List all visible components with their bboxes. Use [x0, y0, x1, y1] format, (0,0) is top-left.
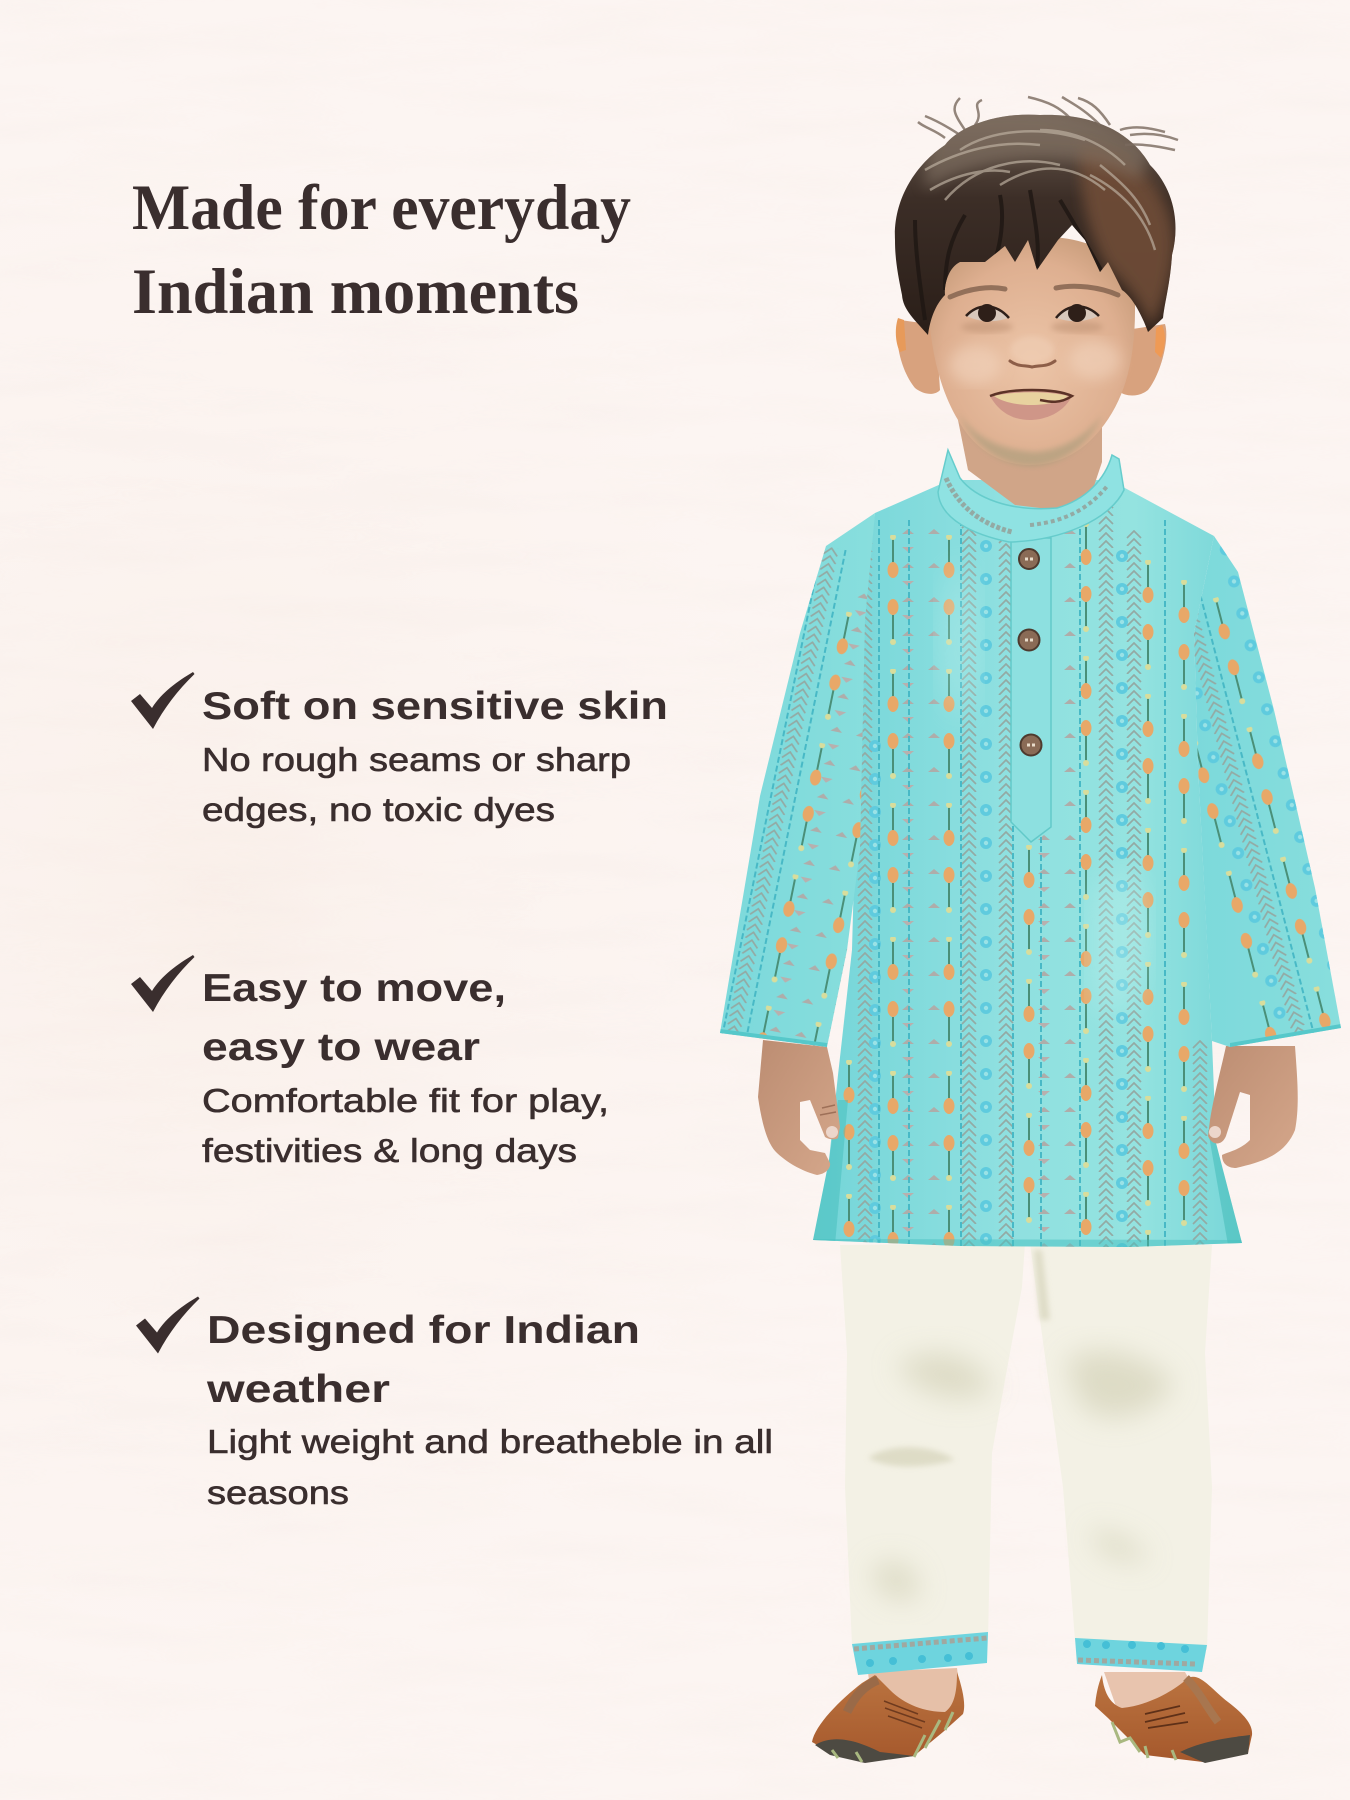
- kurta collar: [938, 450, 1124, 542]
- benefit heading: [206, 1309, 640, 1411]
- cheek highlights: [949, 340, 1121, 385]
- benefit description: [202, 1082, 609, 1169]
- right trouser cuff: [1075, 1638, 1207, 1672]
- photo: smiling boy in kurta: [684, 97, 1350, 1763]
- benefit description: Comfortable fit for play,: [202, 1082, 609, 1119]
- trouser wrinkle lines: [868, 1250, 1050, 1466]
- benefit heading: weather: [206, 1368, 390, 1411]
- smile: [990, 390, 1072, 420]
- icon: check mark: [136, 1296, 200, 1354]
- brown side of hair: [925, 108, 1175, 330]
- ears: [896, 318, 1166, 396]
- right trouser leg: [1030, 1243, 1212, 1650]
- head: [895, 97, 1178, 466]
- benefit description: seasons: [207, 1474, 349, 1511]
- face: [928, 236, 1135, 465]
- left sleeve: [720, 513, 875, 1047]
- title: Indian moments: [132, 256, 579, 328]
- under-eye shading: [961, 321, 1103, 333]
- kurta buttons: [1018, 549, 1042, 756]
- right shoe: [1095, 1672, 1252, 1763]
- icon: check mark: [131, 955, 194, 1012]
- hair: [895, 97, 1178, 335]
- right hand: [1208, 1046, 1298, 1168]
- title: Made for everyday: [132, 172, 631, 244]
- icon: check mark: [131, 672, 194, 729]
- benefit description: edges, no toxic dyes: [202, 791, 555, 828]
- left hand: [758, 1040, 840, 1175]
- eyebrows: [950, 286, 1118, 297]
- title: [132, 172, 631, 328]
- stray hair wisps: [918, 97, 1178, 150]
- benefit heading: Soft on sensitive skin: [202, 685, 668, 728]
- left trouser cuff: [852, 1632, 988, 1675]
- benefit description: No rough seams or sharp: [202, 741, 631, 778]
- trousers: [840, 1243, 1212, 1675]
- dark fringe strands: [915, 190, 1102, 320]
- benefit heading: [202, 967, 506, 1069]
- left trouser leg: [840, 1243, 1025, 1645]
- kurta placket: [1011, 538, 1051, 842]
- benefit: easy to move: [131, 955, 609, 1169]
- trouser fold shadows: [870, 1351, 1175, 1600]
- jaw and chin shadow: [958, 412, 1102, 466]
- right eye: [1056, 304, 1099, 322]
- left eye: [966, 304, 1009, 322]
- benefit heading: easy to wear: [202, 1026, 480, 1069]
- benefit: soft on sensitive skin: [131, 672, 668, 828]
- nose: [1010, 336, 1055, 367]
- benefit: designed for Indian weather: [136, 1296, 773, 1511]
- benefit heading: Designed for Indian: [207, 1309, 640, 1352]
- benefit heading: Easy to move,: [202, 967, 506, 1010]
- hair highlights: [925, 130, 1155, 250]
- neck: [958, 420, 1102, 510]
- benefit description: [202, 741, 631, 828]
- benefit description: [207, 1423, 773, 1511]
- kurta body: [810, 480, 1245, 1255]
- kurta print columns: [810, 500, 1245, 1255]
- benefit description: festivities & long days: [202, 1132, 577, 1169]
- benefit description: Light weight and breatheble in all: [207, 1423, 773, 1460]
- left shoe: [812, 1668, 964, 1763]
- right sleeve: [1194, 536, 1341, 1047]
